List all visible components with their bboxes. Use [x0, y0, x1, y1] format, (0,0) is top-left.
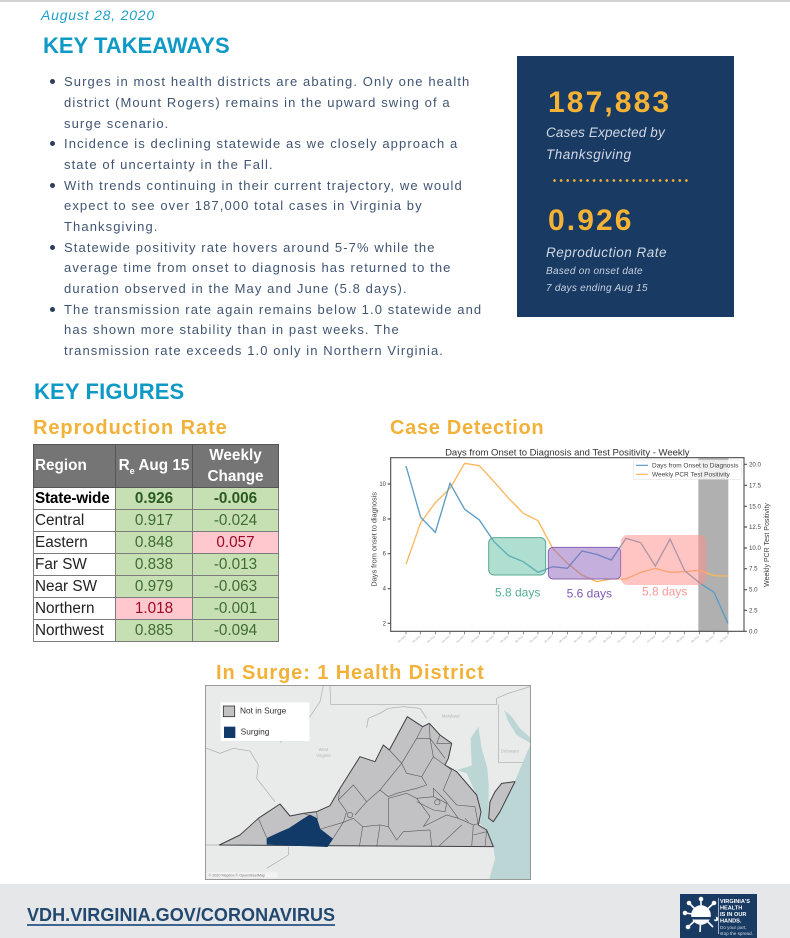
date tick labels: 07-2020	[617, 634, 627, 644]
label: 5.8 days teal: 5.8 days	[495, 586, 540, 600]
table: reproduction rate by region: Far SW	[35, 556, 87, 572]
right axis labels: 0.0	[749, 628, 758, 635]
faint place names: Maryland	[442, 713, 460, 718]
chart: days from onset to diagnosis and test positivity	[369, 447, 771, 644]
table: reproduction rate by region: -0.024	[214, 512, 257, 528]
left axis labels: 4	[383, 587, 387, 593]
date tick labels: 08-2020	[690, 634, 700, 644]
panel: headline numbers	[517, 56, 734, 317]
text block: takeaways list: surge scenario.	[64, 116, 169, 131]
table: reproduction rate by region: State-wide	[35, 490, 110, 506]
date tick labels	[397, 634, 729, 644]
shaded recent period band	[698, 458, 728, 632]
top shadow edge	[0, 0, 790, 2]
line: days from onset to diagnosis	[406, 466, 728, 623]
footer link: VDH.VIRGINIA.GOV/CORONAVIRUS	[27, 905, 335, 925]
logo: Virginia's health is in our hands	[680, 894, 757, 938]
right axis labels: 7.5	[749, 566, 758, 573]
text block: takeaways list: has shown more stability than in past weeks. The	[64, 322, 400, 337]
right axis labels: 12.5	[749, 524, 762, 531]
map legend: Not in Surge	[240, 705, 287, 715]
logo: Virginia's health is in our hands: HANDS.	[720, 918, 742, 924]
date: August 28, 2020	[41, 7, 155, 23]
date tick labels: 06-2020	[602, 634, 612, 644]
table: reproduction rate by region: 0.848	[135, 534, 173, 550]
faint place names: Delaware	[501, 748, 520, 753]
table: reproduction rate by region: 0.979	[135, 578, 173, 594]
right axis labels: 5.0	[749, 587, 758, 594]
faint place names: West	[318, 747, 329, 752]
reproduction rate label: Reproduction Rate	[546, 245, 667, 260]
highlight: 5.8 days teal	[489, 538, 546, 575]
map base land	[205, 685, 531, 880]
text block: takeaways list: duration observed in the May and June (5.8 days).	[64, 281, 408, 296]
map: health districts in surge	[205, 685, 531, 880]
reproduction rate note: 7 days ending Aug 15	[546, 283, 648, 294]
left axis labels: 2	[383, 621, 387, 627]
text block: takeaways list: transmission rate exceeds 1.0 only in Northern Virginia.	[64, 343, 444, 358]
date tick labels: 08-2020	[705, 634, 715, 644]
text block: takeaways list: Statewide positivity rate hovers around 5-7% while the	[64, 240, 436, 255]
text block: takeaways list: district (Mount Rogers) remains in the upward swing of a	[64, 95, 451, 110]
text block: takeaways list: With trends continuing in their current trajectory, we would	[64, 178, 463, 193]
table: reproduction rate by region: -0.001	[214, 600, 257, 616]
table: reproduction rate by region	[33, 444, 279, 642]
table: reproduction rate by region: Weekly	[209, 447, 262, 464]
chart legend: Weekly PCR Test Positivity	[652, 472, 731, 479]
water	[457, 710, 531, 879]
date tick labels: 05-2020	[514, 634, 524, 644]
text block: takeaways list: Thanksgiving.	[64, 219, 159, 234]
table: reproduction rate by region: Region	[35, 457, 87, 474]
map attribution: © 2020 Mapbox © OpenStreetMap	[209, 873, 265, 877]
right axis labels: 2.5	[749, 607, 758, 614]
table: reproduction rate by region: -0.094	[214, 622, 257, 638]
map legend	[221, 702, 309, 741]
cases expected label: Cases Expected by	[546, 125, 665, 140]
date tick labels: 07-2020	[661, 634, 671, 644]
logo: Virginia's health is in our hands: VIRGINIA'S	[720, 899, 750, 905]
highlight: 5.8 days pink	[621, 535, 706, 585]
table: reproduction rate by region: Re Aug 15	[119, 457, 189, 476]
table: reproduction rate by region: 0.885	[135, 622, 173, 638]
date tick labels: 05-2020	[529, 634, 539, 644]
date tick labels: 08-2020	[675, 634, 686, 644]
text block: takeaways list: state of uncertainty in the Fall.	[64, 157, 274, 172]
right axis labels: 15.0	[749, 503, 762, 510]
table: reproduction rate by region: Near SW	[35, 578, 97, 594]
text block: takeaways list	[50, 74, 482, 358]
right axis labels: 20.0	[749, 461, 762, 468]
date tick labels: 06-2020	[573, 634, 583, 644]
right axis labels: 10.0	[749, 545, 762, 552]
map frame	[205, 685, 531, 880]
table: reproduction rate by region: Northern	[35, 600, 95, 616]
date tick labels: 07-2020	[646, 634, 656, 644]
table: reproduction rate by region: -0.013	[214, 556, 257, 572]
map attribution	[207, 872, 277, 878]
left axis labels	[379, 482, 387, 627]
logo: Virginia's health is in our hands: Do your part,	[720, 925, 747, 930]
text block: takeaways list: average time from onset to diagnosis has returned to the	[64, 260, 452, 275]
cases expected number: 187,883	[548, 86, 671, 119]
date tick labels: 08-2020	[719, 634, 729, 644]
reproduction rate number: 0.926	[548, 204, 634, 237]
reproduction rate note	[546, 266, 648, 294]
heading: key figures: KEY FIGURES	[34, 379, 184, 404]
neighboring state borders	[205, 686, 530, 868]
reproduction rate note: Based on onset date	[546, 266, 643, 277]
line: weekly PCR test positivity	[406, 463, 728, 582]
highlight: 5.6 days purple	[548, 547, 621, 579]
footer band	[0, 884, 790, 938]
dotted divider	[553, 179, 691, 182]
date tick labels: 03-2020	[411, 634, 422, 644]
left axis labels: 6	[383, 552, 387, 558]
date tick labels: 04-2020	[470, 634, 480, 644]
faint place names	[316, 713, 520, 758]
Mount Rogers district surging	[267, 815, 333, 847]
logo: Virginia's health is in our hands: stop the spread.	[720, 931, 753, 936]
text block: takeaways list: expect to see over 187,000 total cases in Virginia by	[64, 198, 423, 213]
map legend: Surging	[241, 726, 270, 736]
heading: case detection: Case Detection	[390, 417, 544, 439]
heading: in surge: In Surge: 1 Health District	[216, 662, 485, 684]
table: reproduction rate by region: Change	[207, 468, 264, 485]
chart frame and ticks	[388, 458, 747, 634]
date tick labels: 05-2020	[485, 634, 495, 644]
table: reproduction rate by region: Northwest	[35, 622, 104, 638]
date tick labels: 04-2020	[426, 634, 436, 644]
logo: Virginia's health is in our hands: IS IN OUR	[720, 912, 746, 918]
chart legend: Days from Onset to Diagnosis	[652, 463, 739, 470]
left axis title: Days from onset to diagnosis	[369, 492, 378, 587]
label: 5.6 days purple: 5.6 days	[567, 587, 612, 601]
date tick labels: 04-2020	[441, 634, 451, 644]
date tick labels: 06-2020	[587, 634, 598, 644]
table: reproduction rate by region: 1.018	[135, 600, 173, 616]
table: reproduction rate by region: 0.926	[135, 490, 173, 506]
table: reproduction rate by region: 0.057	[216, 534, 255, 550]
chart title: Days from Onset to Diagnosis and Test Positivity - Weekly	[445, 447, 690, 458]
date tick labels: 03-2020	[397, 634, 407, 644]
table: reproduction rate by region: -0.063	[214, 578, 257, 594]
date tick labels: 05-2020	[543, 634, 554, 644]
date tick labels: 05-2020	[499, 634, 510, 644]
faint place names: Virginia	[316, 753, 331, 758]
text block: takeaways list: The transmission rate again remains below 1.0 statewide and	[64, 302, 482, 317]
Virginia districts not in surge	[219, 717, 493, 847]
right axis labels	[749, 461, 762, 635]
heading: key takeaways: KEY TAKEAWAYS	[43, 33, 230, 58]
table: reproduction rate by region: Central	[35, 512, 84, 528]
table: reproduction rate by region: Eastern	[35, 534, 88, 550]
table: reproduction rate by region: -0.006	[214, 490, 257, 506]
date tick labels: 04-2020	[455, 634, 466, 644]
cases expected label	[546, 125, 666, 162]
label: 5.8 days pink: 5.8 days	[642, 585, 687, 599]
left axis labels: 10	[379, 482, 387, 488]
cases expected label: Thanksgiving	[546, 147, 632, 162]
chart legend	[633, 460, 741, 479]
table: reproduction rate by region: 0.917	[135, 512, 173, 528]
right axis labels: 17.5	[749, 482, 762, 489]
right axis title: Weekly PCR Test Positivity	[764, 503, 771, 587]
district boundaries	[240, 723, 487, 847]
date tick labels: 06-2020	[558, 634, 568, 644]
text block: takeaways list: Incidence is declining statewide as we closely approach a	[64, 136, 458, 151]
text block: takeaways list: Surges in most health districts are abating. Only one health	[64, 74, 470, 89]
left axis labels: 8	[383, 517, 387, 523]
heading: reproduction rate: Reproduction Rate	[33, 417, 228, 439]
table: reproduction rate by region: 0.838	[135, 556, 173, 572]
logo: Virginia's health is in our hands: HEALTH	[720, 906, 742, 912]
Eastern Shore	[489, 782, 515, 822]
date tick labels: 07-2020	[631, 634, 642, 644]
